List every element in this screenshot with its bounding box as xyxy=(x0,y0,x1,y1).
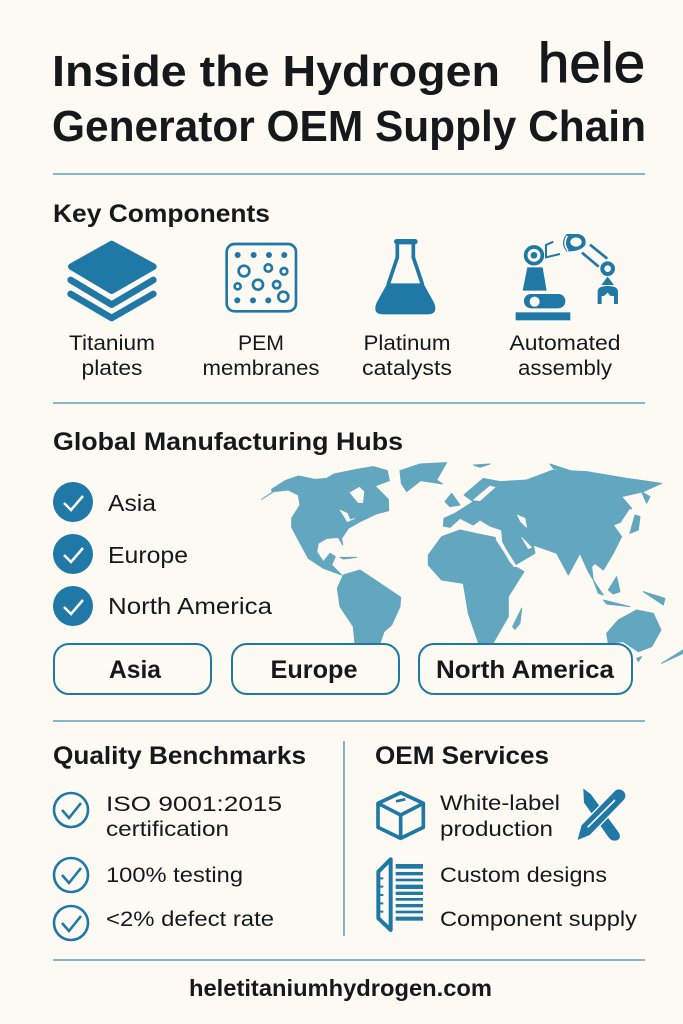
world map xyxy=(262,463,683,663)
icon: PEM membrane xyxy=(227,244,296,311)
button: north america xyxy=(419,644,632,694)
text: white-label production: White-label xyxy=(440,792,560,815)
icon: box xyxy=(378,793,423,838)
list: hub regions xyxy=(53,482,272,626)
title: Inside the Hydrogen xyxy=(52,47,500,96)
panel: oem services xyxy=(375,742,638,931)
check: testing xyxy=(54,858,88,892)
heading: oem services: OEM Services xyxy=(375,742,549,770)
label: automated assembly xyxy=(510,332,620,380)
check: europe xyxy=(53,534,93,574)
icon: pencil and ruler xyxy=(577,789,626,841)
button: europe: Europe xyxy=(270,656,358,684)
panel: key components xyxy=(69,234,620,380)
button: asia: Asia xyxy=(109,656,162,684)
label: PEM membranes xyxy=(202,332,320,380)
text: europe: Europe xyxy=(108,542,188,568)
button: north america: North America xyxy=(436,656,615,684)
text: asia: Asia xyxy=(108,490,156,516)
label: titanium plates xyxy=(69,332,155,380)
label: PEM membranes: membranes xyxy=(202,357,320,380)
text: iso: ISO 9001:2015 xyxy=(106,793,282,816)
title: Generator OEM Supply Chain xyxy=(52,102,646,151)
panel: quality benchmarks xyxy=(53,742,306,940)
text: iso: certification xyxy=(106,818,229,841)
heading: global manufacturing hubs: Global Manufacturing Hubs xyxy=(53,428,403,456)
icon: flask xyxy=(375,242,435,314)
text: white-label production xyxy=(440,792,560,841)
label: platinum catalysts: catalysts xyxy=(362,357,452,380)
footer url: heletitaniumhydrogen.com xyxy=(189,975,492,1001)
label: platinum catalysts: Platinum xyxy=(364,332,450,355)
title xyxy=(52,47,646,151)
icon: comb panel xyxy=(378,859,423,930)
button: asia xyxy=(54,644,211,694)
text: iso xyxy=(106,793,282,841)
text: testing: 100% testing xyxy=(106,864,243,887)
label: platinum catalysts xyxy=(362,332,452,380)
label: automated assembly: assembly xyxy=(518,357,613,380)
text: defect rate: <2% defect rate xyxy=(106,908,274,931)
icon: robot arm xyxy=(516,234,618,320)
check: defect rate xyxy=(54,906,88,940)
check: iso xyxy=(54,793,88,827)
text: north america: North America xyxy=(108,593,272,619)
label: PEM membranes: PEM xyxy=(238,332,284,355)
text: component supply: Component supply xyxy=(440,908,638,931)
icon: titanium plates xyxy=(71,244,153,318)
button: europe xyxy=(232,644,399,694)
text: custom designs: Custom designs xyxy=(440,864,607,887)
text: white-label production: production xyxy=(440,818,553,841)
check: asia xyxy=(53,482,93,522)
label: titanium plates: Titanium xyxy=(69,332,155,355)
heading: quality benchmarks: Quality Benchmarks xyxy=(53,742,306,770)
map water details xyxy=(340,486,634,567)
logo: hele: hele xyxy=(538,31,645,94)
label: titanium plates: plates xyxy=(82,357,142,380)
heading: key components: Key Components xyxy=(53,200,270,228)
check: north america xyxy=(53,586,93,626)
label: automated assembly: Automated xyxy=(510,332,620,355)
